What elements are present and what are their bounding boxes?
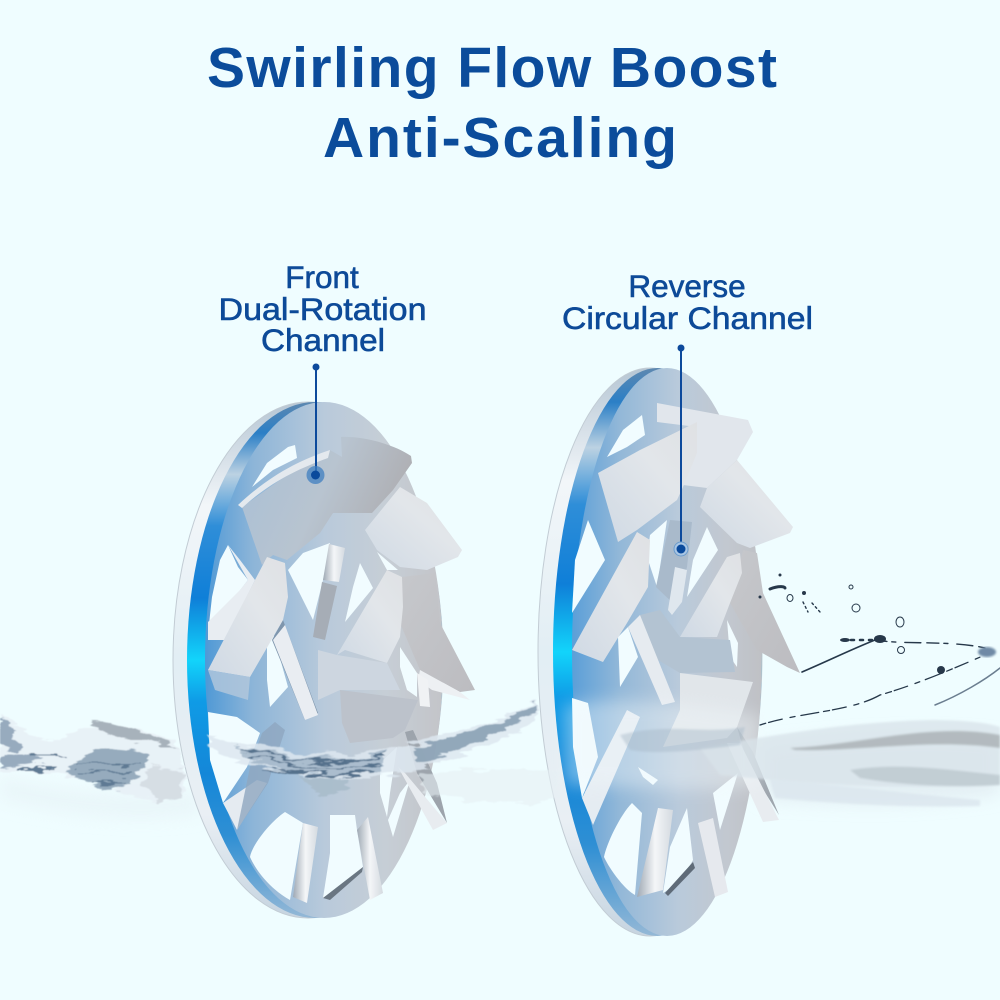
- water: centre band: [205, 700, 560, 802]
- disc rim: [538, 368, 762, 936]
- panel: reverse disc: [538, 368, 800, 936]
- blade: upper top: [657, 403, 753, 488]
- label: front: Channel: [261, 322, 385, 358]
- water: veil over reverse disc: [565, 701, 760, 789]
- label: reverse: Reverse: [628, 268, 746, 304]
- blade: far right grey: [730, 550, 800, 673]
- blade: middle right: [337, 570, 403, 663]
- blue glow band: [187, 402, 443, 918]
- leader line: reverse: [674, 344, 688, 556]
- lower strips: [293, 823, 318, 903]
- lower right wedge: [405, 730, 447, 823]
- blade: middle left: [572, 532, 650, 662]
- panel: front disc: [173, 402, 475, 918]
- strip over upper slot: [238, 450, 330, 508]
- blade: lower centre: [663, 673, 753, 747]
- white diagonal strip: [273, 625, 318, 720]
- blade: middle right: [680, 553, 742, 637]
- water: right band: [620, 720, 1000, 806]
- blade: lower centre: [340, 690, 418, 743]
- label: reverse: [562, 268, 813, 336]
- blade: upper large: [242, 437, 412, 565]
- blade: far right grey: [400, 573, 475, 692]
- lower left strip: [582, 710, 640, 825]
- label: front: [218, 259, 426, 358]
- blade: middle left: [208, 557, 288, 677]
- title: Swirling Flow Boost: [207, 36, 777, 100]
- disc body: [572, 368, 762, 936]
- disc rim: [173, 402, 443, 918]
- reflective centre spoke: [323, 544, 345, 582]
- label: reverse: Circular Channel: [562, 300, 813, 336]
- white crossing strip: [208, 545, 255, 640]
- lower right wedge: [737, 727, 779, 815]
- title: Anti-Scaling: [323, 106, 677, 170]
- water: right droplet cluster: [758, 574, 996, 674]
- background water haze: [0, 734, 1000, 819]
- water: left splash: [0, 715, 186, 805]
- blade: upper left: [598, 422, 697, 542]
- cut-outs: [208, 445, 417, 900]
- leader line: front: [306, 364, 324, 484]
- blade: upper right: [700, 460, 793, 548]
- central spoke: [656, 520, 692, 607]
- white diagonal strip: [628, 615, 675, 705]
- hub: [640, 610, 735, 673]
- small strip: [417, 673, 430, 707]
- hub: [318, 650, 400, 700]
- water: splash droplets: [760, 585, 1000, 725]
- label: front: Dual-Rotation: [218, 291, 426, 327]
- title: [207, 36, 777, 170]
- label: front: Front: [285, 259, 359, 295]
- blade: upper right light: [365, 487, 462, 570]
- disc body: [205, 402, 443, 918]
- blue glow band: [553, 368, 762, 936]
- cut-outs: [572, 415, 738, 895]
- shadow under hub: [272, 620, 318, 720]
- strip right: [418, 670, 470, 700]
- lower strips: [637, 808, 673, 897]
- lower left strips: [223, 780, 267, 830]
